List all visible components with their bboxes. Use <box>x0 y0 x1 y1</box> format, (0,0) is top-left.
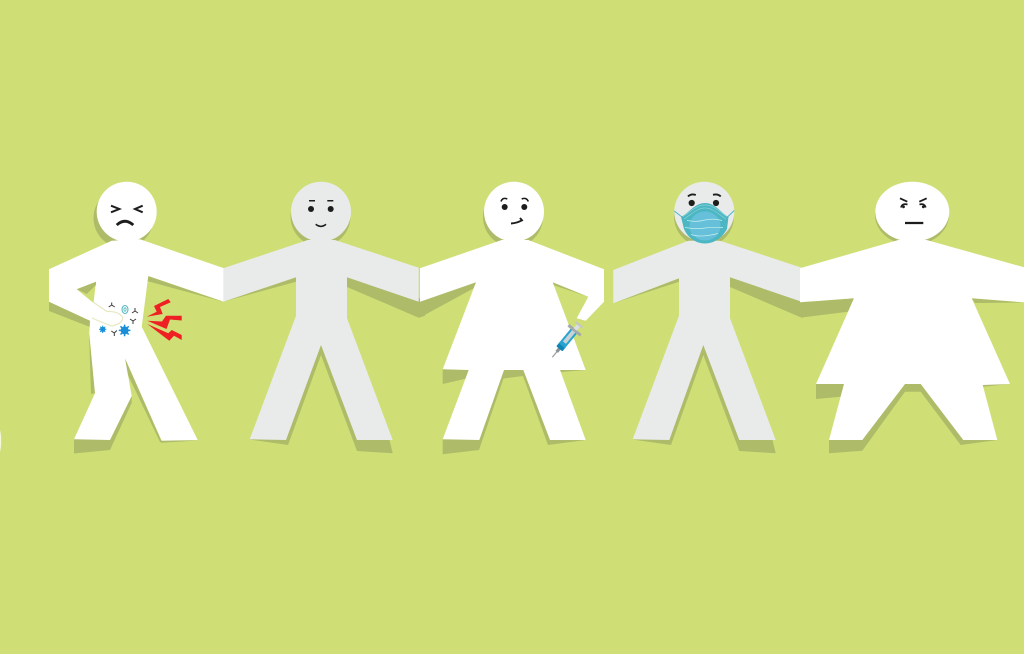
figure 5 head <box>875 182 949 242</box>
icon: red pain bolts <box>147 299 182 341</box>
figure 2 shadow <box>223 186 425 453</box>
icon: syringe <box>546 319 586 362</box>
hand outline <box>92 302 123 326</box>
figure 2 head <box>291 182 351 242</box>
icon: large blue virus <box>119 325 130 336</box>
figure 2 face <box>308 201 334 226</box>
icon: teal cell <box>122 306 128 314</box>
icon: small blue virus <box>99 326 106 333</box>
figure 1 pained face <box>111 206 143 225</box>
figure 4 eyes and brows <box>688 194 721 206</box>
figure 5 body and dress <box>800 240 1024 440</box>
figure 3: person in dress with syringe <box>420 182 604 454</box>
figure 1: person with abdominal pain <box>49 182 224 453</box>
figure 2: smiling grey person <box>223 182 425 453</box>
figure 2 body <box>223 240 419 440</box>
figure 1 shadow <box>49 188 224 454</box>
figure 3 shadow <box>420 187 588 454</box>
icons: antibodies <box>109 302 138 336</box>
figure 4 head <box>674 182 734 242</box>
figure 4 body <box>613 241 802 440</box>
figure 3 body and dress <box>420 240 604 440</box>
arm gap <box>77 282 96 303</box>
figure 5: wide person in dress with displeased face <box>800 182 1024 453</box>
figure 4: grey person wearing a surgical mask <box>613 182 810 453</box>
figure 1 body <box>49 239 224 441</box>
surgical mask <box>674 203 734 244</box>
figure 3 head <box>484 182 544 242</box>
figure 1 head <box>97 182 157 242</box>
figure 5 displeased face <box>900 198 927 223</box>
figure 4 shadow <box>613 186 810 453</box>
figure 5 shadow <box>802 185 1024 453</box>
figure 3 quizzical face <box>501 198 528 224</box>
